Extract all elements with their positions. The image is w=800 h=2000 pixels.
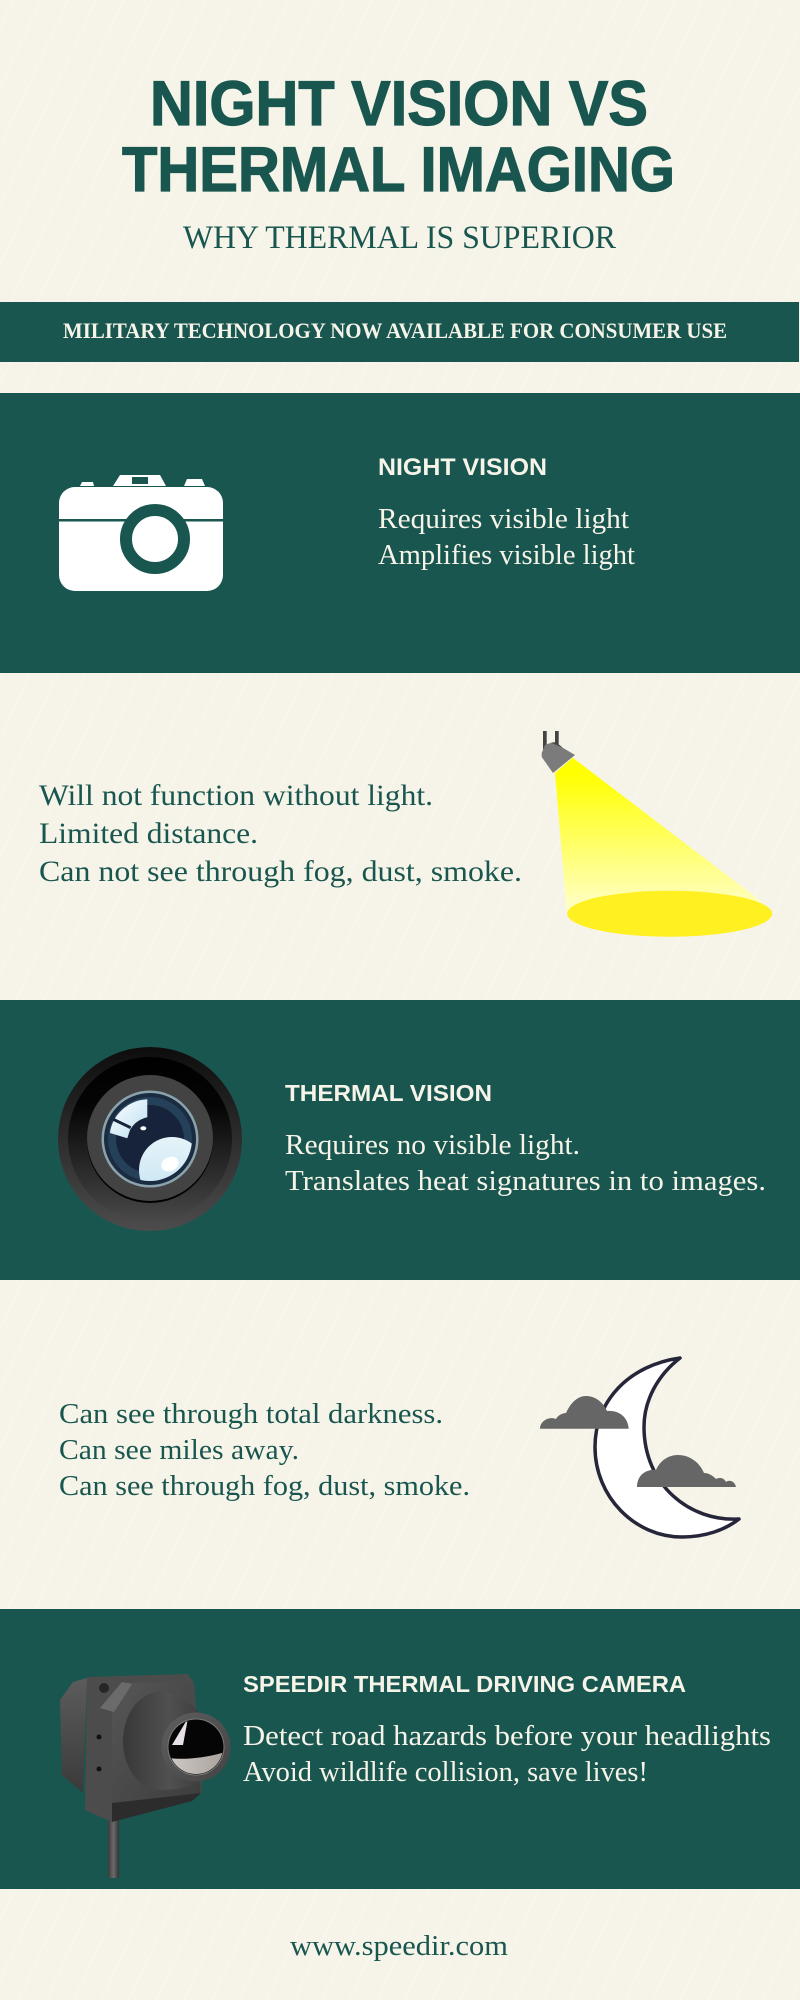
title: NIGHT VISION VS — [150, 69, 648, 139]
night vision limitations text: Will not function without light. — [39, 779, 433, 812]
heading: thermal vision: THERMAL VISION — [285, 1080, 492, 1106]
night vision limitations text: Can not see through fog, dust, smoke. — [39, 855, 522, 888]
icon: moon and clouds — [540, 1358, 739, 1537]
thermal advantages text: Can see miles away. — [59, 1434, 299, 1466]
title: THERMAL IMAGING — [122, 135, 675, 205]
title — [122, 69, 675, 205]
night vision text — [378, 503, 635, 571]
icon: camera — [59, 475, 223, 591]
product text: Detect road hazards before your headlights — [243, 1720, 771, 1752]
icon: camera lens — [58, 1047, 242, 1231]
thermal vision text: Translates heat signatures in to images. — [285, 1165, 766, 1197]
panel: night vision — [0, 393, 800, 673]
night vision text: Requires visible light — [378, 503, 629, 535]
banner — [0, 302, 799, 362]
product text — [243, 1720, 771, 1788]
night vision limitations text: Limited distance. — [39, 817, 258, 850]
heading: night vision: NIGHT VISION — [378, 454, 547, 481]
subtitle: WHY THERMAL IS SUPERIOR — [183, 220, 616, 256]
night vision text: Amplifies visible light — [378, 539, 635, 571]
banner: MILITARY TECHNOLOGY NOW AVAILABLE FOR CONSUMER USE — [63, 318, 727, 343]
product text: Avoid wildlife collision, save lives! — [243, 1756, 648, 1788]
panel: thermal vision — [0, 1000, 800, 1280]
thermal advantages text: Can see through fog, dust, smoke. — [59, 1470, 470, 1502]
thermal advantages text: Can see through total darkness. — [59, 1398, 443, 1430]
footer website: www.speedir.com — [290, 1931, 508, 1962]
thermal vision text — [285, 1129, 766, 1197]
thermal vision text: Requires no visible light. — [285, 1129, 580, 1161]
panel: speedir thermal driving camera — [0, 1609, 800, 1889]
night vision limitations text — [39, 779, 522, 888]
heading: speedir thermal driving camera: SPEEDIR THERMAL DRIVING CAMERA — [243, 1671, 686, 1697]
icon: spotlight — [542, 731, 772, 937]
product photo: thermal camera — [60, 1674, 230, 1878]
thermal advantages text — [59, 1398, 470, 1502]
